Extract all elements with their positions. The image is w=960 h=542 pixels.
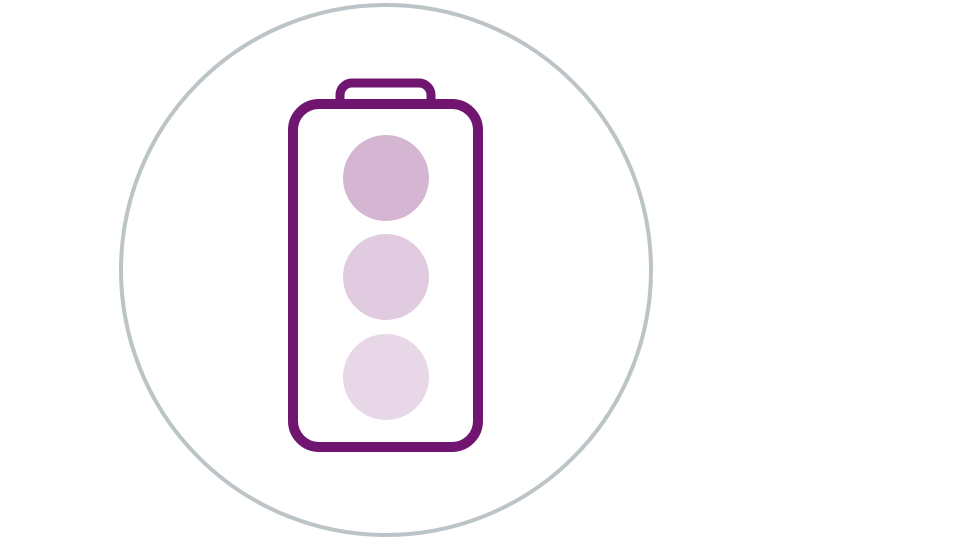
- charge dot 3: [343, 334, 429, 420]
- icon: battery: [293, 83, 478, 447]
- charge dot 2: [343, 234, 429, 320]
- charge dot 1: [343, 135, 429, 221]
- circle frame: [121, 5, 651, 535]
- battery cap: [340, 83, 431, 113]
- battery body: [293, 104, 478, 447]
